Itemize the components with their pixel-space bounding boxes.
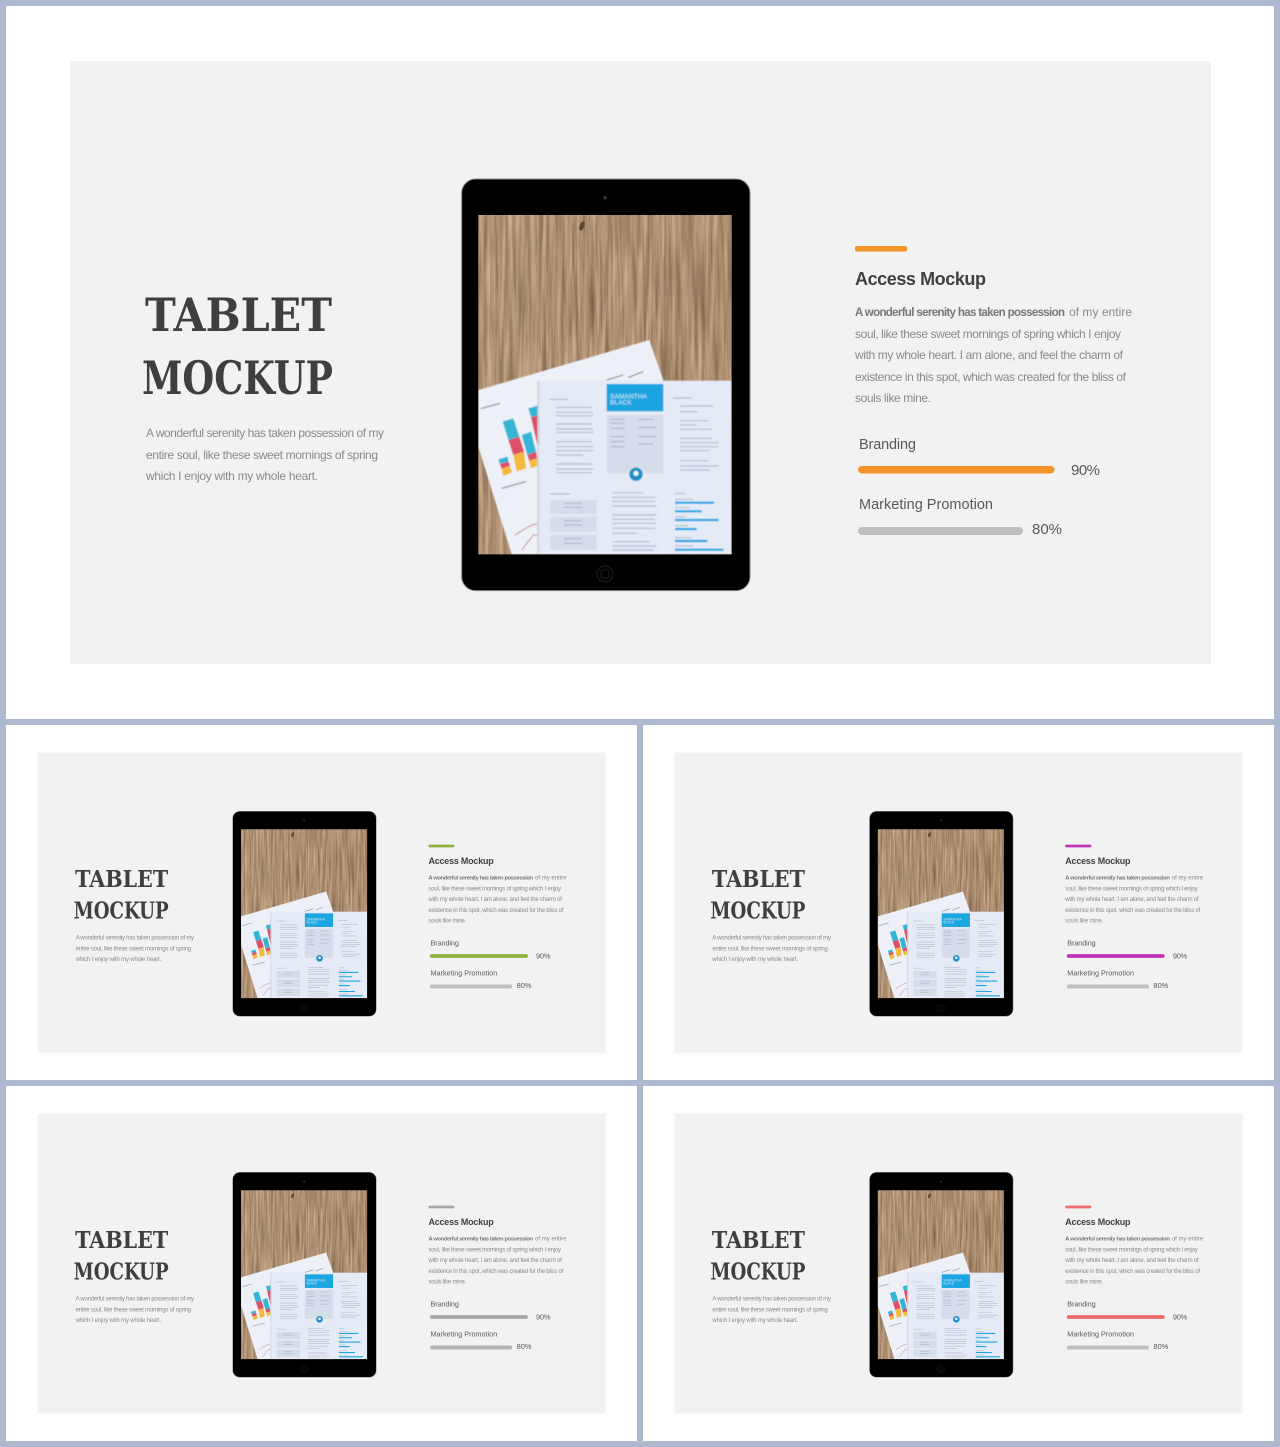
intro text	[145, 426, 384, 483]
description text: A wonderful serenity has taken possession	[1065, 1237, 1170, 1243]
progress: branding	[430, 939, 551, 961]
description text: souls like mine.	[429, 918, 467, 924]
title	[74, 867, 169, 924]
intro text: entire soul, like these sweet mornings of spring	[712, 1308, 828, 1314]
intro text	[711, 1297, 831, 1324]
back paper with bar chart	[478, 340, 667, 554]
title: TABLET	[712, 867, 805, 893]
tablet home button	[597, 566, 613, 582]
progress: marketing promotion: 80%	[517, 981, 532, 990]
description text: souls like mine.	[855, 391, 931, 405]
intro text: A wonderful serenity has taken possession of my	[76, 1297, 194, 1303]
description text: with my whole heart. I am alone, and feel the charm of	[428, 1258, 562, 1264]
panel: small slide, coral	[675, 1114, 1243, 1414]
title: MOCKUP	[142, 351, 333, 405]
progress: branding: 90%	[1173, 1313, 1188, 1322]
progress: marketing promotion: 80%	[517, 1342, 532, 1351]
papers	[478, 340, 732, 554]
progress: marketing promotion: Marketing Promotion	[859, 497, 993, 513]
progress: marketing promotion: 80%	[1153, 981, 1169, 990]
title: MOCKUP	[710, 898, 805, 924]
progress: branding: Branding	[431, 939, 459, 948]
front resume sheet: BLACK	[610, 399, 632, 406]
small slide background: gray	[6, 1086, 637, 1441]
description text	[428, 1237, 567, 1285]
large slide background	[6, 6, 1274, 719]
description text	[428, 876, 567, 924]
description text: of my entire	[1172, 1237, 1204, 1243]
tablet mockup	[870, 1172, 1013, 1377]
section heading: Access Mockup	[1065, 1217, 1131, 1227]
progress: branding	[430, 1300, 551, 1322]
description text: existence in this spot, which was created for the bliss of	[429, 1269, 564, 1275]
tablet body	[462, 179, 750, 591]
tablet mockup	[233, 1172, 376, 1377]
intro text: A wonderful serenity has taken possession of my	[76, 936, 194, 942]
intro text: A wonderful serenity has taken possession of my	[146, 426, 384, 440]
tablet camera	[603, 196, 607, 199]
progress: marketing promotion	[858, 497, 1062, 538]
intro text: entire soul, like these sweet mornings of spring	[146, 448, 378, 462]
description text: soul, like these sweet mornings of spring which I enjoy	[429, 1247, 561, 1253]
progress: branding	[1067, 939, 1188, 961]
panel: main slide, orange	[70, 61, 1211, 664]
title	[710, 867, 805, 924]
progress: branding: 90%	[536, 952, 551, 961]
section heading: Access Mockup	[429, 1217, 494, 1227]
description text: souls like mine.	[1065, 1279, 1103, 1285]
description text: A wonderful serenity has taken possession	[855, 307, 1065, 319]
section heading: Access Mockup	[1065, 856, 1131, 866]
intro text: which I enjoy with my whole heart.	[75, 957, 162, 963]
small slide background: green	[6, 725, 637, 1080]
progress: branding	[1067, 1300, 1188, 1322]
small slide background: magenta	[643, 725, 1274, 1080]
description text: existence in this spot, which was created for the bliss of	[1065, 908, 1201, 914]
description text: with my whole heart. I am alone, and feel the charm of	[1064, 897, 1199, 903]
description text: of my entire	[535, 1237, 567, 1243]
tablet mockup	[462, 179, 750, 591]
description text: soul, like these sweet mornings of spring which I enjoy	[1065, 1247, 1198, 1253]
progress: branding: Branding	[1067, 1300, 1096, 1309]
tablet mockup	[870, 811, 1013, 1016]
intro text: which I enjoy with my whole heart.	[711, 1318, 798, 1324]
title	[74, 1228, 169, 1285]
section heading: Access Mockup	[429, 856, 494, 866]
description text: of my entire	[535, 876, 567, 882]
description text: A wonderful serenity has taken possession	[429, 1237, 534, 1243]
progress: branding: Branding	[431, 1300, 459, 1309]
description text: with my whole heart. I am alone, and feel the charm of	[1064, 1258, 1199, 1264]
description text: with my whole heart. I am alone, and feel the charm of	[428, 897, 562, 903]
title	[142, 288, 333, 405]
accent bar	[1065, 1206, 1091, 1208]
progress: branding: 90%	[536, 1313, 551, 1322]
intro text: entire soul, like these sweet mornings of spring	[712, 947, 828, 953]
progress: marketing promotion	[430, 1330, 532, 1351]
progress: marketing promotion	[1067, 1330, 1169, 1351]
title: MOCKUP	[74, 898, 169, 924]
description text: existence in this spot, which was created for the bliss of	[429, 908, 564, 914]
accent bar	[855, 246, 907, 252]
description text: existence in this spot, which was created for the bliss of	[1065, 1269, 1201, 1275]
progress: marketing promotion: Marketing Promotion	[431, 969, 497, 978]
progress: marketing promotion: Marketing Promotion	[1067, 1330, 1134, 1339]
panel: small slide, magenta	[675, 753, 1243, 1053]
intro text	[75, 936, 194, 963]
intro text: which I enjoy with my whole heart.	[145, 469, 318, 483]
description text: with my whole heart. I am alone, and feel the charm of	[854, 348, 1124, 362]
tablet screen photo	[478, 215, 732, 554]
title: TABLET	[145, 288, 332, 342]
description text: soul, like these sweet mornings of spring which I enjoy	[1065, 886, 1198, 892]
intro text	[711, 936, 831, 963]
description text: A wonderful serenity has taken possession	[1065, 876, 1170, 882]
description text	[1064, 1237, 1204, 1285]
description text: A wonderful serenity has taken possession	[429, 876, 534, 882]
progress: branding: Branding	[859, 437, 916, 453]
intro text: A wonderful serenity has taken possession of my	[712, 936, 831, 942]
description text: of my entire	[1172, 876, 1204, 882]
accent bar	[429, 845, 454, 847]
description text: souls like mine.	[1065, 918, 1103, 924]
title: MOCKUP	[74, 1259, 169, 1285]
section heading: Access Mockup	[855, 269, 986, 289]
panel: small slide, green	[38, 753, 606, 1053]
description text: souls like mine.	[429, 1279, 467, 1285]
front resume sheet: SAMANTHA	[610, 393, 648, 400]
front resume sheet	[537, 381, 732, 554]
wood background	[478, 215, 732, 554]
title: MOCKUP	[710, 1259, 805, 1285]
progress: marketing promotion: 80%	[1153, 1342, 1169, 1351]
title: TABLET	[75, 1228, 168, 1254]
panel: small slide, gray	[38, 1114, 606, 1414]
intro text: which I enjoy with my whole heart.	[711, 957, 798, 963]
progress: marketing promotion	[1067, 969, 1169, 990]
intro text	[75, 1297, 194, 1324]
tablet mockup	[233, 811, 376, 1016]
intro text: entire soul, like these sweet mornings of spring	[76, 1308, 191, 1314]
accent bar	[1065, 845, 1091, 847]
title: TABLET	[75, 867, 168, 893]
description text: existence in this spot, which was created for the bliss of	[855, 370, 1127, 384]
intro text: A wonderful serenity has taken possession of my	[712, 1297, 831, 1303]
small slide background: coral	[643, 1086, 1274, 1441]
progress: marketing promotion: Marketing Promotion	[431, 1330, 497, 1339]
progress: branding: 90%	[1071, 462, 1100, 479]
progress: branding	[858, 437, 1100, 479]
accent bar	[429, 1206, 454, 1208]
intro text: which I enjoy with my whole heart.	[75, 1318, 162, 1324]
title: TABLET	[712, 1228, 805, 1254]
progress: marketing promotion: Marketing Promotion	[1067, 969, 1134, 978]
description text: soul, like these sweet mornings of spring which I enjoy	[429, 886, 561, 892]
progress: marketing promotion	[430, 969, 532, 990]
progress: branding: 90%	[1173, 952, 1188, 961]
progress: branding: Branding	[1067, 939, 1096, 948]
title	[710, 1228, 805, 1285]
description text: soul, like these sweet mornings of spring which I enjoy	[855, 327, 1121, 341]
progress: marketing promotion: 80%	[1032, 521, 1062, 538]
description text	[854, 305, 1132, 405]
description text	[1064, 876, 1204, 924]
description text: of my entire	[1069, 305, 1132, 319]
intro text: entire soul, like these sweet mornings of spring	[76, 947, 191, 953]
